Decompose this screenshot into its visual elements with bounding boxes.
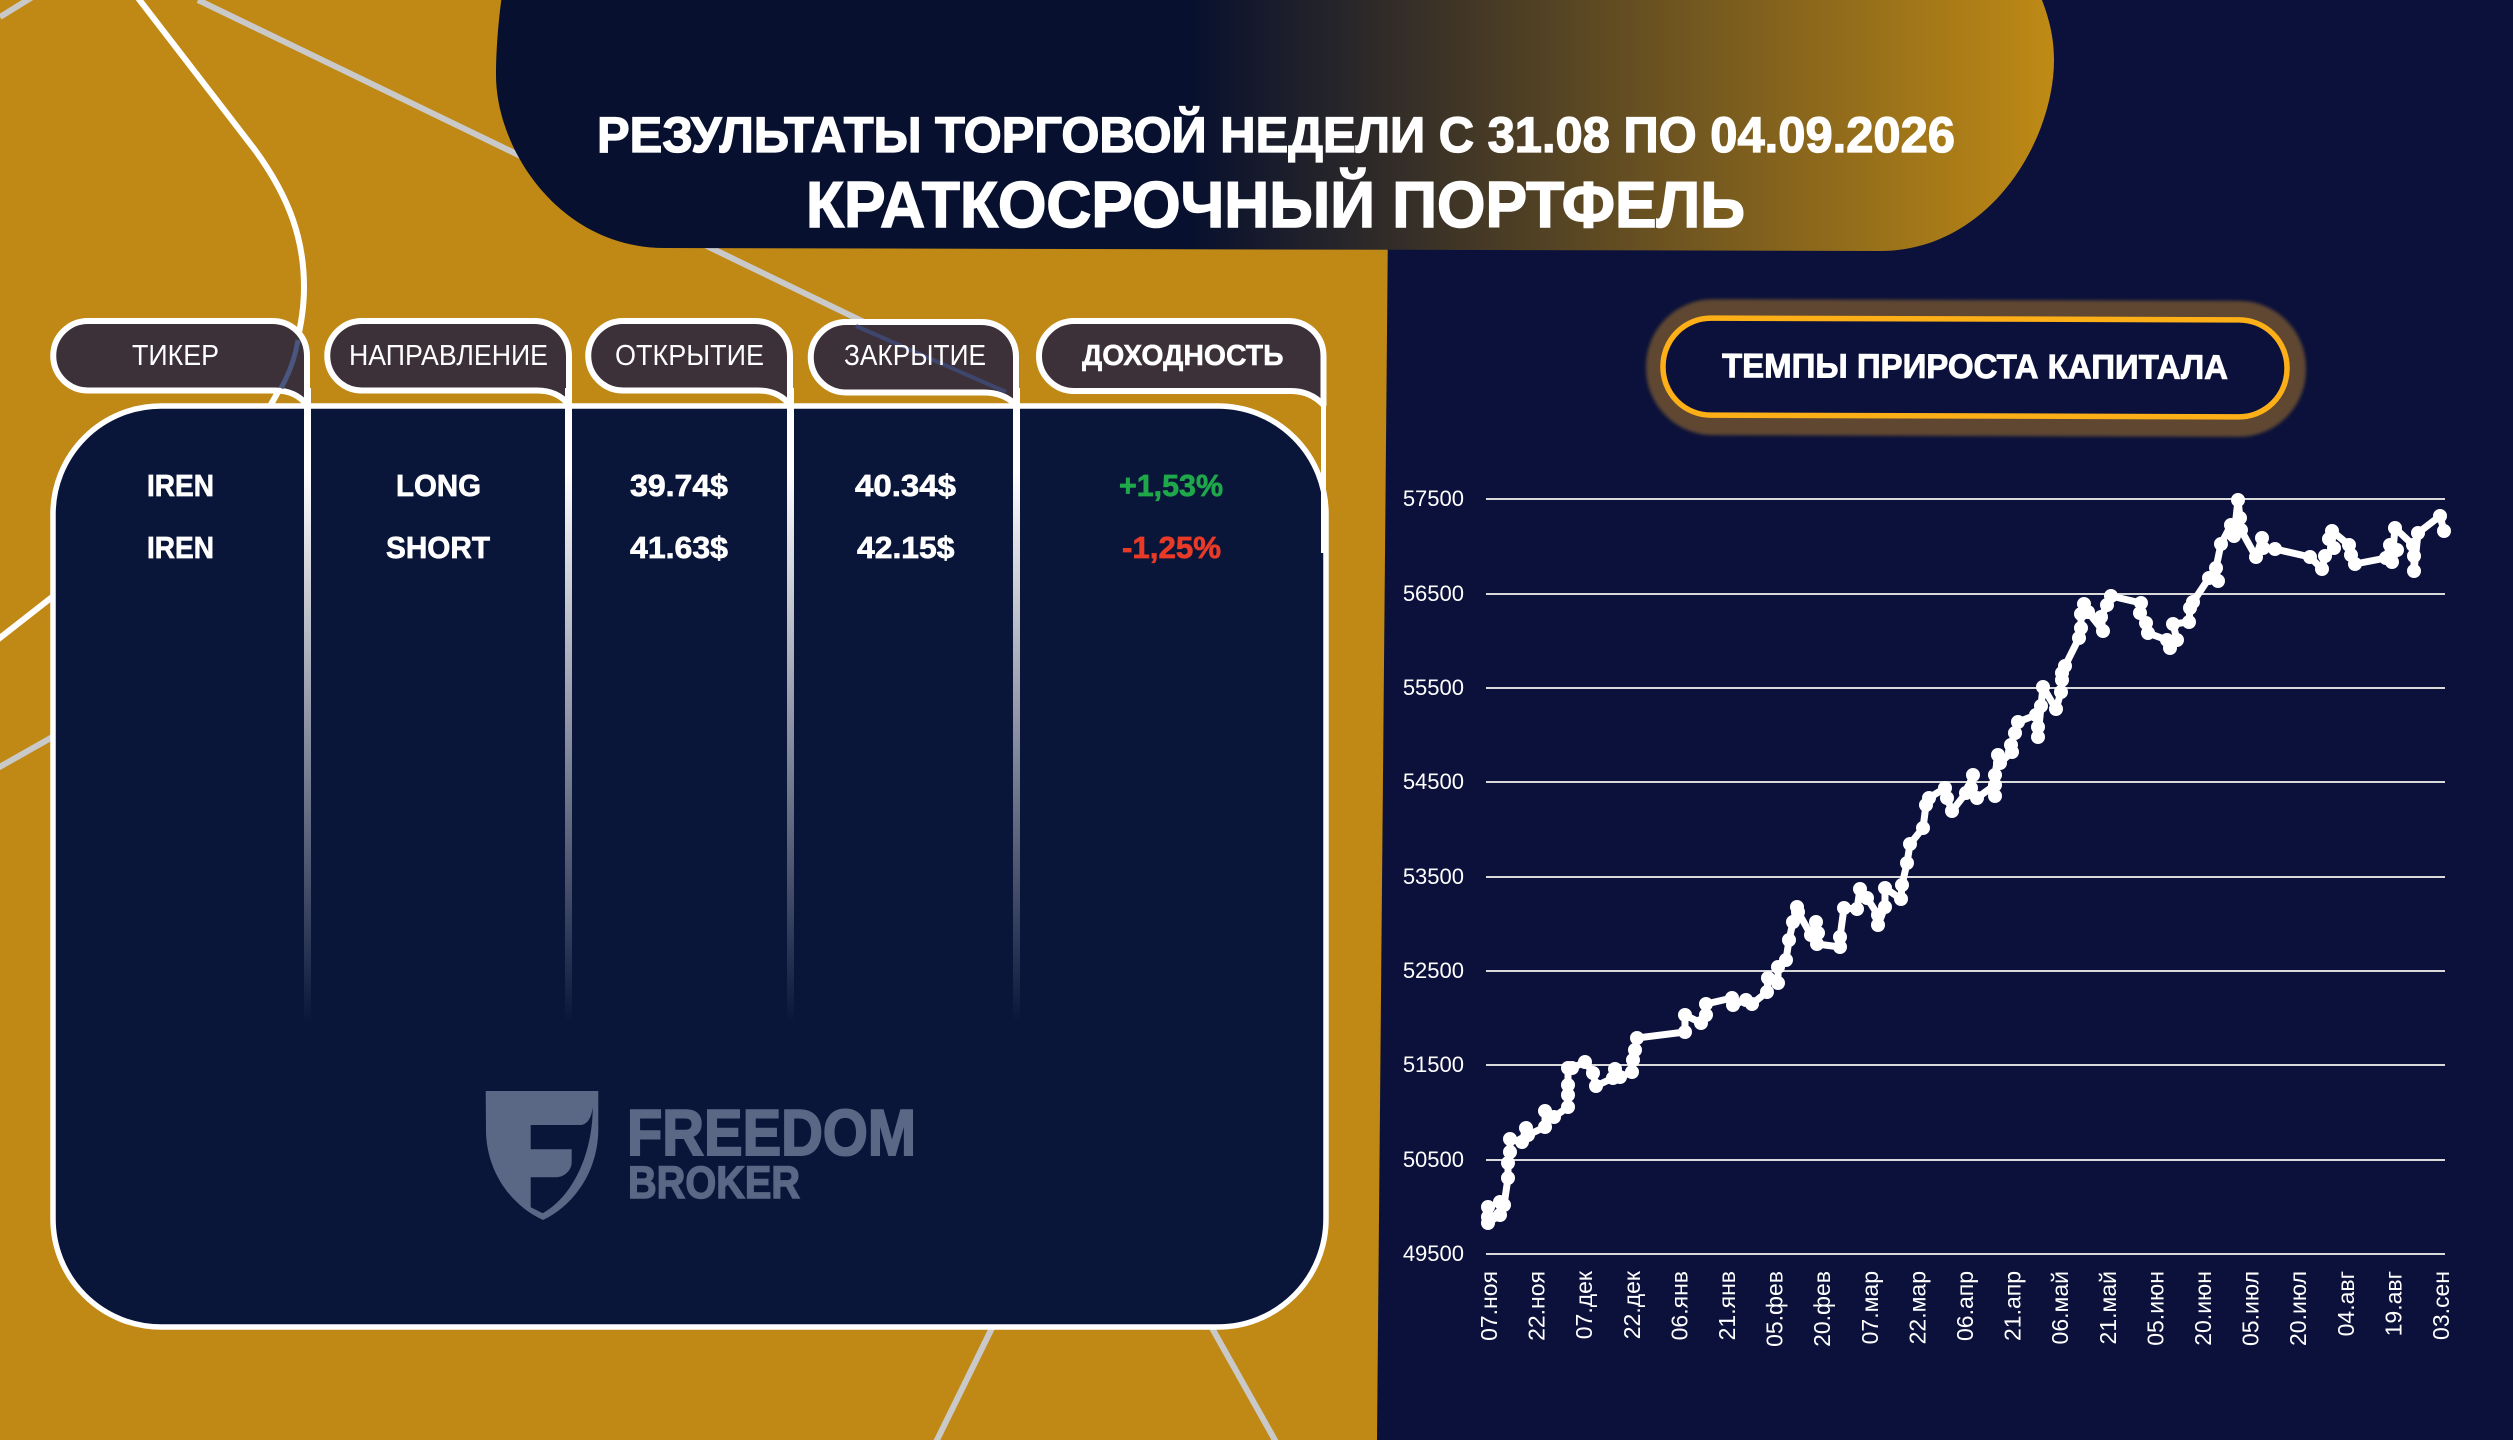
title banner: [496, 0, 2054, 251]
header tab: direction: НАПРАВЛЕНИЕ: [349, 340, 548, 372]
table row 1: IREN: [147, 468, 214, 503]
x axis labels: 06.янв: [1666, 1271, 1692, 1340]
x axis labels: 21.апр: [2000, 1271, 2026, 1341]
x axis labels: 07.ноя: [1476, 1271, 1502, 1341]
table row 1: LONG: [396, 468, 481, 503]
header tab: direction: [327, 321, 569, 405]
table panel: [53, 406, 1326, 1327]
x axis labels: 22.мар: [1904, 1271, 1930, 1344]
logo wordmark broker: BROKER: [628, 1157, 800, 1208]
header tab: close: [811, 322, 1016, 405]
table row 1: [147, 468, 1223, 503]
column dividers: [304, 385, 1326, 1022]
y axis labels: 56500: [1403, 581, 1464, 606]
x axis labels: 07.дек: [1571, 1270, 1597, 1339]
header tab: yield: ДОХОДНОСТЬ: [1082, 340, 1284, 372]
x axis labels: 04.авг: [2333, 1271, 2359, 1336]
x axis labels: 20.июн: [2190, 1271, 2216, 1346]
y axis labels: [1403, 486, 1464, 1266]
table row 1: 39.74$: [630, 468, 728, 503]
x axis labels: 21.май: [2095, 1271, 2121, 1344]
x axis labels: 22.дек: [1619, 1270, 1645, 1339]
left gold background: [0, 0, 1390, 1440]
y axis labels: 49500: [1403, 1241, 1464, 1266]
x axis labels: 22.ноя: [1524, 1271, 1550, 1341]
table row 2: 42.15$: [857, 530, 954, 565]
x axis labels: 20.июл: [2285, 1271, 2311, 1346]
x axis labels: 05.июн: [2142, 1271, 2168, 1346]
header tab: open: ОТКРЫТИЕ: [615, 340, 764, 372]
table row 1: +1,53%: [1119, 468, 1223, 503]
watermark logo: [486, 1091, 916, 1220]
x axis labels: 05.июл: [2238, 1271, 2264, 1346]
table row 2: -1,25%: [1122, 530, 1221, 565]
header tab: close: ЗАКРЫТИЕ: [844, 340, 986, 372]
header tab: yield: [1039, 321, 1324, 405]
x axis labels: 06.май: [2047, 1271, 2073, 1344]
table row 1: 40.34$: [855, 468, 956, 503]
header tab: open: [588, 321, 790, 405]
table row 2: 41.63$: [630, 530, 728, 565]
y axis labels: 54500: [1403, 769, 1464, 794]
table row 2: IREN: [147, 530, 214, 565]
y axis labels: 50500: [1403, 1147, 1464, 1172]
x axis labels: 06.апр: [1952, 1271, 1978, 1341]
table row 2: SHORT: [386, 530, 490, 565]
chart grid: [1486, 499, 2445, 1254]
line chart: capital growth: [1403, 486, 2454, 1347]
x axis labels: 07.мар: [1857, 1271, 1883, 1344]
chart heading pill: ТЕМПЫ ПРИРОСТА КАПИТАЛА: [1722, 347, 2228, 387]
logo wordmark freedom: FREEDOM: [627, 1096, 916, 1169]
background lines: [0, 0, 1276, 1440]
title line 1: РЕЗУЛЬТАТЫ ТОРГОВОЙ НЕДЕЛИ С 31.08 ПО 04.09.2026: [597, 106, 1955, 163]
x axis labels: 05.фев: [1762, 1271, 1788, 1347]
y axis labels: 52500: [1403, 958, 1464, 983]
header tab: ticker: ТИКЕР: [132, 340, 219, 372]
y axis labels: 53500: [1403, 864, 1464, 889]
x axis labels: 03.сен: [2428, 1271, 2454, 1340]
title line 2: КРАТКОСРОЧНЫЙ ПОРТФЕЛЬ: [806, 168, 1745, 241]
y axis labels: 57500: [1403, 486, 1464, 511]
table row 2: [147, 530, 1221, 565]
y axis labels: 55500: [1403, 675, 1464, 700]
x axis labels: 19.авг: [2380, 1271, 2406, 1336]
x axis labels: [1476, 1270, 2454, 1347]
x axis labels: 20.фев: [1809, 1271, 1835, 1347]
data line with markers: [1488, 500, 2444, 1223]
x axis labels: 21.янв: [1714, 1271, 1740, 1340]
y axis labels: 51500: [1403, 1052, 1464, 1077]
chart heading pill: [1646, 299, 2306, 437]
header tab: ticker: [53, 321, 307, 405]
logo shield: [486, 1091, 598, 1220]
